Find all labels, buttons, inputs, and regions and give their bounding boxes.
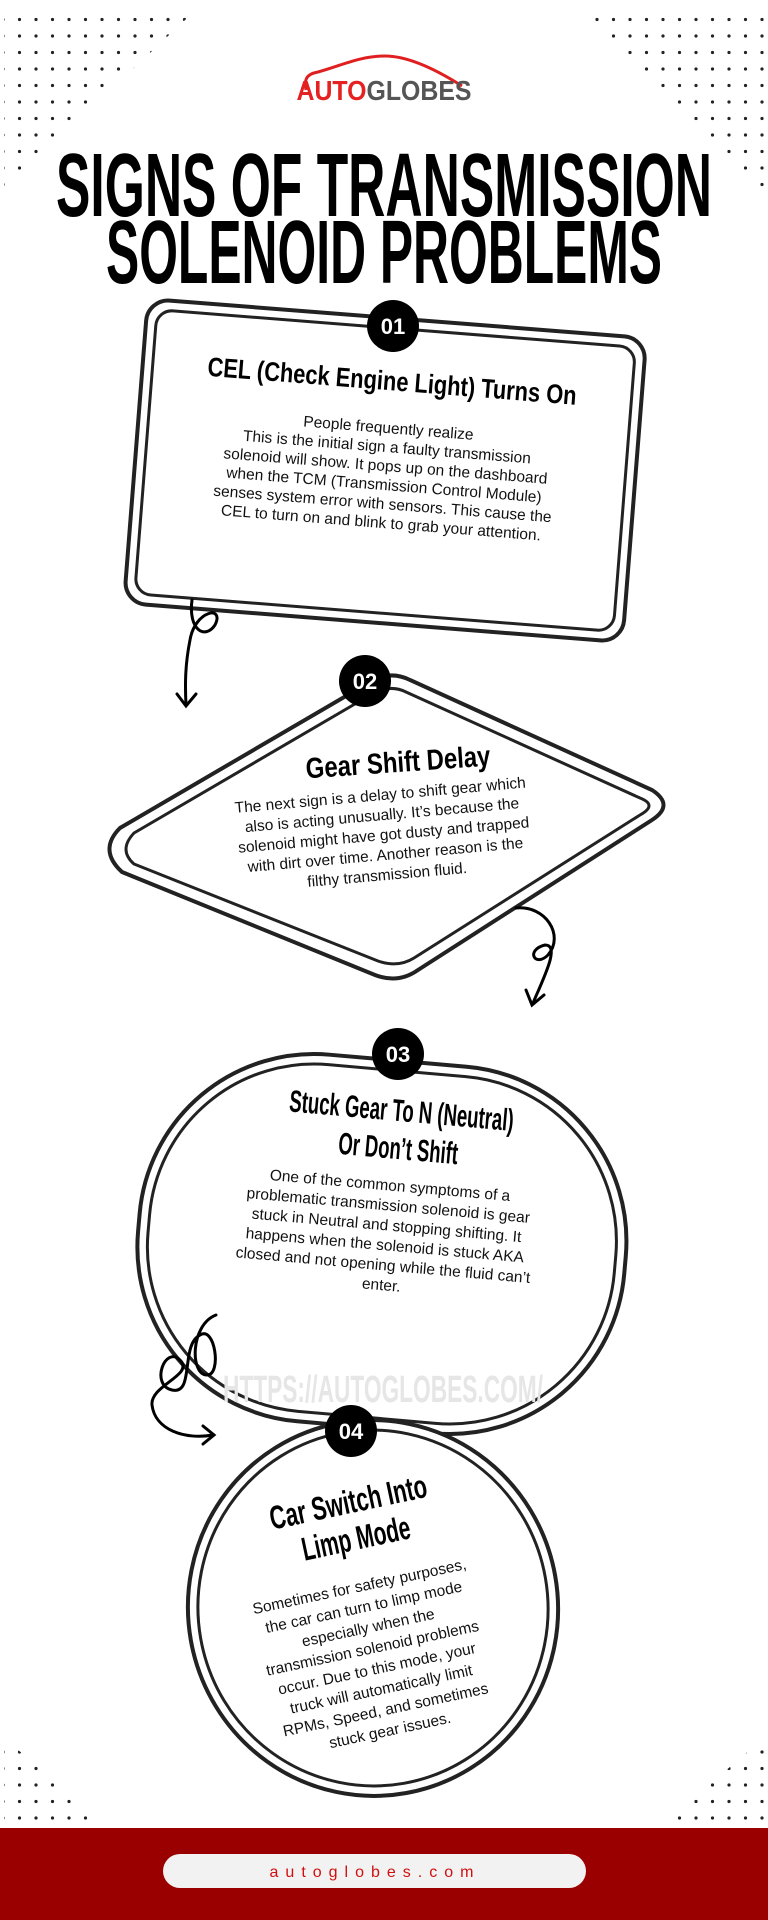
heading 04: Limp Mode	[298, 1509, 413, 1568]
text 02: also is acting unusually. It’s because the	[244, 795, 520, 836]
text 01: when the TCM (Transmission Control Module)	[225, 465, 542, 506]
text 04: RPMs, Speed, and sometimes	[282, 1680, 490, 1740]
text 01: This is the initial sign a faulty transmission	[242, 428, 531, 467]
panel: 03 Stuck Gear: Or Don’t Shift	[337, 1126, 460, 1171]
heading 01: CEL (Check Engine Light) Turns On	[207, 352, 578, 411]
panel: 01 CEL	[124, 299, 646, 642]
text 03: closed and not opening while the fluid can’t	[235, 1244, 532, 1287]
heading 02: Gear Shift Delay	[305, 741, 491, 785]
text 03: problematic transmission solenoid is gear	[246, 1185, 531, 1227]
heading 04: Car Switch Into	[266, 1467, 430, 1537]
arrow 2	[516, 908, 554, 1005]
badge 01	[367, 300, 419, 352]
badge 03	[372, 1028, 424, 1080]
text 02: solenoid might have got dusty and trapped	[237, 814, 530, 857]
text 01: CEL to turn on and blink to grab your attention.	[220, 502, 542, 544]
panel: 04 Limp Mode	[158, 1391, 588, 1825]
text 04: occur. Due to this mode, your	[277, 1640, 477, 1699]
text 03: happens when the solenoid is stuck AKA	[245, 1225, 525, 1266]
badge 02: 02	[353, 669, 377, 694]
text 01: People frequently realize	[303, 413, 474, 444]
logo: AUTOGLOBES	[296, 75, 472, 106]
decorative dots bottom-left	[4, 1738, 110, 1828]
text 02: with dirt over time. Another reason is the	[246, 835, 524, 876]
badge 04: 04	[339, 1419, 364, 1444]
arrow 3	[152, 1315, 216, 1444]
title	[56, 136, 712, 303]
heading 03: Stuck Gear To N (Neutral)	[288, 1083, 515, 1138]
badge 04	[325, 1405, 377, 1457]
badge 03: 03	[386, 1042, 410, 1067]
text 04: Sometimes for safety purposes,	[251, 1556, 468, 1618]
text 01: senses system error with sensors. This cause the	[213, 483, 552, 526]
footer pill	[163, 1854, 586, 1888]
text 03: enter.	[361, 1275, 401, 1296]
footer band	[0, 1828, 768, 1920]
footer band: autoglobes.com	[270, 1864, 480, 1881]
heading 04	[266, 1467, 438, 1573]
text 03: One of the common symptoms of a	[269, 1167, 511, 1205]
text 04: transmission solenoid problems	[265, 1618, 481, 1680]
panel: 03 Stuck Gear	[123, 1028, 641, 1449]
text 04: the car can turn to limp mode	[264, 1578, 464, 1637]
text 01: solenoid will show. It pops up on the dashboard	[223, 445, 548, 488]
text 04: especially when the	[300, 1606, 436, 1651]
logo	[296, 56, 472, 106]
text 02: filthy transmission fluid.	[307, 860, 468, 891]
text 04: truck will automatically limit	[289, 1662, 475, 1717]
decorative dots top-right	[572, 6, 764, 190]
text 04: stuck gear issues.	[328, 1710, 453, 1752]
decorative dots bottom-right	[658, 1738, 764, 1828]
text 02: The next sign is a delay to shift gear which	[234, 775, 526, 817]
badge 01: 01	[381, 314, 405, 339]
panel: 02 Gear Shift Delay	[109, 655, 663, 979]
watermark: HTTPS://AUTOGLOBES.COM/	[223, 1369, 543, 1411]
arrow 1	[177, 600, 217, 706]
text 03: stuck in Neutral and stopping shifting. It	[251, 1206, 523, 1246]
badge 02	[339, 655, 391, 707]
decorative dots top-left	[4, 6, 200, 190]
